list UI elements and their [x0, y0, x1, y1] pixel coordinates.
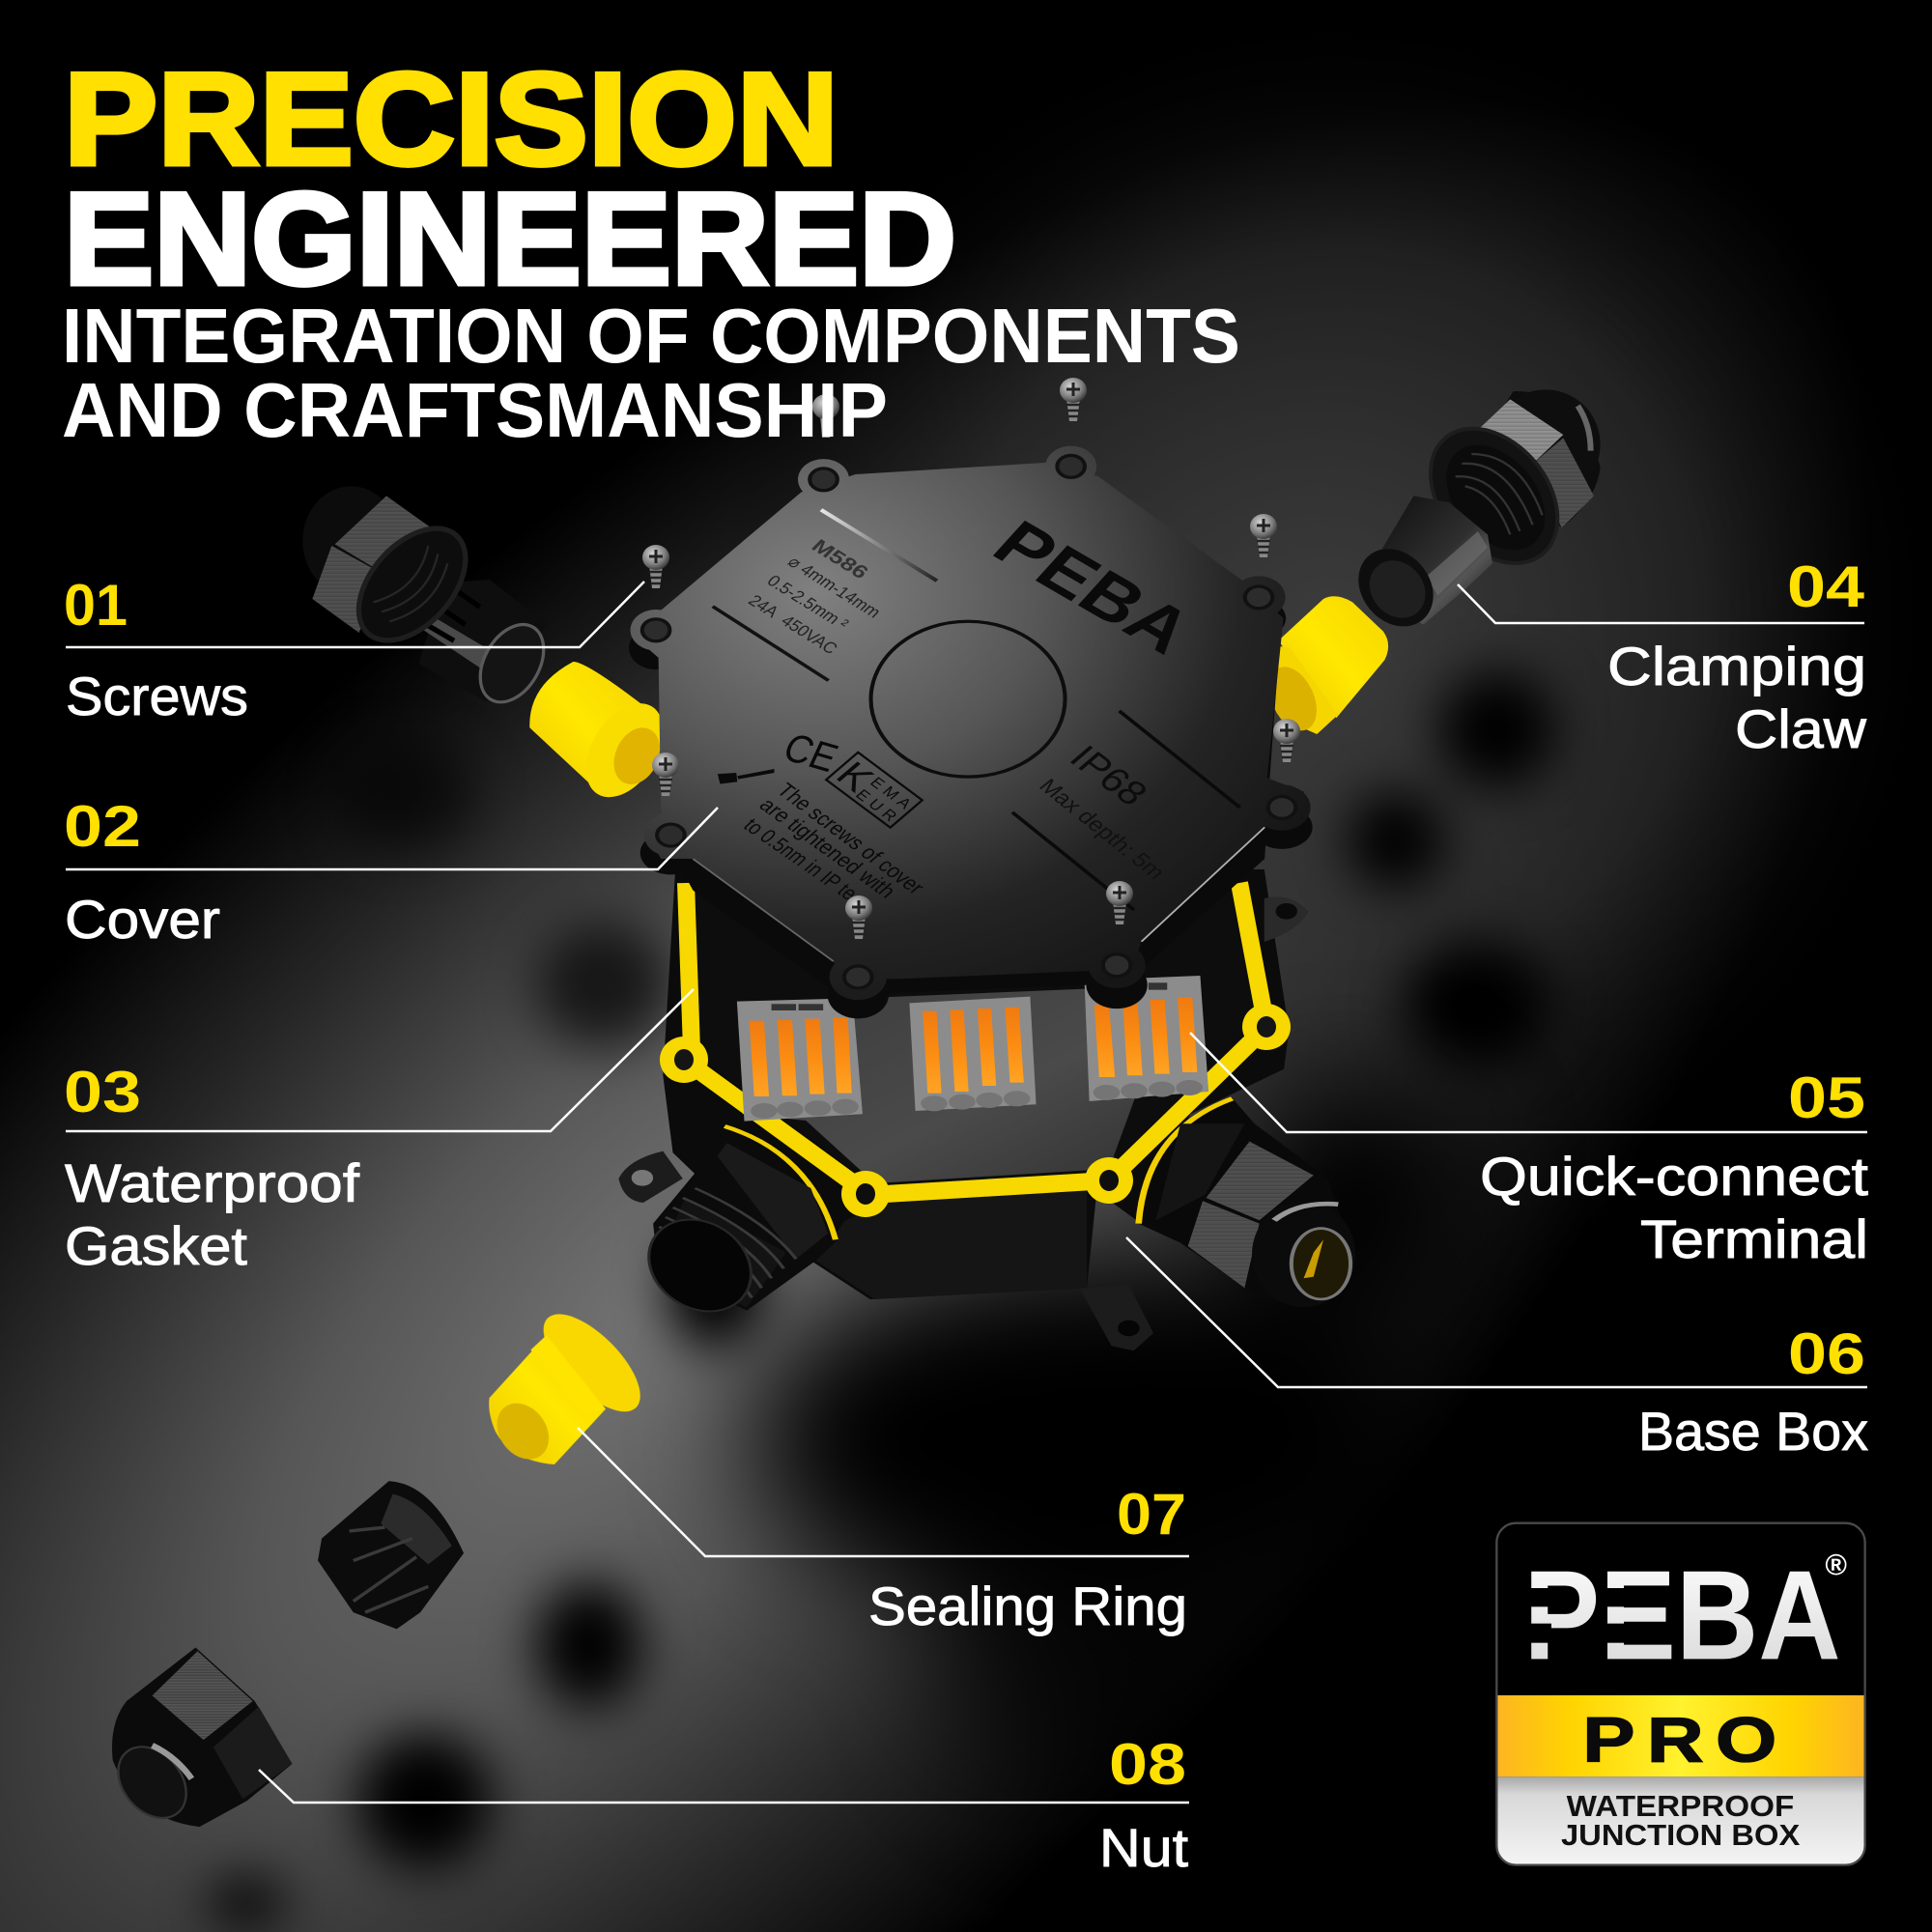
- label 07: [868, 1482, 1187, 1636]
- mounting tab hole left: [632, 1170, 653, 1186]
- terminal middle: [909, 997, 1037, 1111]
- inner floor: [693, 869, 1260, 1186]
- badge caption line 1: WATERPROOF: [1567, 1790, 1794, 1823]
- badge grey footer: [1497, 1776, 1864, 1864]
- clamping claw lower: [318, 1481, 464, 1629]
- icon: waterproof gasket: [660, 883, 1291, 1217]
- icon: top screw: [1060, 378, 1087, 421]
- label 08: 08: [1109, 1732, 1186, 1797]
- label 05: Terminal: [1640, 1208, 1868, 1269]
- label 02: [64, 794, 220, 950]
- cover model text: 0.5-2.5mm ²: [763, 571, 853, 633]
- label 06: 06: [1788, 1321, 1865, 1386]
- label 03: Gasket: [65, 1215, 247, 1276]
- label 04: Claw: [1735, 698, 1867, 759]
- front face: [815, 1190, 1087, 1299]
- cover model text: 24A 450VAC: [745, 591, 841, 658]
- label 03: 03: [64, 1060, 141, 1124]
- subheading line 1: INTEGRATION OF COMPONENTS: [62, 293, 1240, 379]
- cover edge highlight: [693, 827, 1264, 961]
- terminal right: [1085, 976, 1208, 1101]
- cover torque note: to 0.5nm in IP te: [739, 813, 863, 904]
- threaded gland, left: [634, 1126, 838, 1319]
- mounting tab hole right: [1276, 903, 1297, 920]
- sealing ring lower: [487, 1299, 657, 1468]
- cover decorative lines: [713, 510, 1240, 910]
- KEMA KEUR mark: EUR: [852, 786, 901, 825]
- KEMA KEUR mark: [825, 752, 923, 829]
- cover circle: [871, 621, 1065, 777]
- label 07: 07: [1117, 1482, 1186, 1547]
- label 02: Cover: [65, 889, 220, 950]
- nut lower: [104, 1647, 292, 1831]
- registered mark: ®: [1825, 1549, 1847, 1582]
- nut and clamp, upper right: [1343, 389, 1601, 641]
- base box: [618, 869, 1309, 1350]
- leader lines: [66, 582, 1867, 1803]
- badge caption line 2: JUNCTION BOX: [1561, 1819, 1801, 1852]
- icon: screw left: [642, 545, 669, 588]
- label 06: Base Box: [1638, 1401, 1868, 1462]
- label 01: Screws: [66, 666, 248, 726]
- label 04: [1607, 554, 1867, 759]
- quick-connect terminals: [737, 976, 1208, 1122]
- label 01: [64, 573, 248, 726]
- badge base: [1496, 1523, 1865, 1865]
- badge yellow band: [1497, 1695, 1864, 1776]
- label 04: 04: [1787, 554, 1865, 619]
- title: [62, 45, 1240, 453]
- mounting tab hole bottom: [1118, 1321, 1140, 1336]
- icon: screwdriver: [718, 769, 775, 783]
- sealing ring, upper right: [1260, 596, 1388, 738]
- cover torque note: The screws of cover: [772, 779, 930, 898]
- cover top face: [631, 446, 1311, 1000]
- label 06: [1638, 1321, 1868, 1462]
- cover model text: [745, 535, 885, 658]
- mounting tab left: [618, 1151, 683, 1203]
- label 08: [1099, 1732, 1188, 1878]
- cover logo: PEBA: [979, 507, 1208, 668]
- cover rating text: IP68: [1061, 738, 1156, 813]
- terminal left: [737, 998, 863, 1122]
- mounting tab right: [1264, 896, 1309, 942]
- nut and clamp, upper left: [302, 486, 556, 713]
- cover model text: ⌀ 4mm-14mm: [784, 553, 885, 621]
- badge PRO: PRO: [1582, 1703, 1789, 1775]
- exploded parts, lower left: [104, 1299, 657, 1831]
- badge logo: PEBA: [1523, 1544, 1841, 1686]
- cable gland, right: [1139, 1098, 1355, 1307]
- label 05: Quick-connect: [1480, 1146, 1868, 1207]
- cover screw holes: [642, 455, 1295, 988]
- CE mark: CE: [777, 724, 844, 781]
- label 01: 01: [64, 573, 128, 638]
- body: [663, 869, 1289, 1299]
- sealing ring, upper left: [529, 662, 679, 811]
- cover: [629, 446, 1313, 1018]
- KEMA KEUR mark: EMA: [867, 774, 916, 812]
- label 07: Sealing Ring: [868, 1576, 1187, 1636]
- screws on cover: [652, 719, 1300, 939]
- label 08: Nut: [1099, 1817, 1188, 1878]
- cover rating text: Max depth: 5m: [1035, 775, 1171, 884]
- cover model text: M586: [807, 535, 873, 583]
- label 03: [64, 1060, 359, 1276]
- brand badge: [1496, 1523, 1865, 1865]
- mounting tab bottom: [1079, 1285, 1153, 1350]
- badge border: [1496, 1523, 1865, 1865]
- label 03: Waterproof: [65, 1152, 359, 1213]
- heading: precision: PRECISION: [64, 45, 838, 192]
- label 02: 02: [64, 794, 141, 859]
- heading: engineered: ENGINEERED: [64, 165, 956, 312]
- cover side thickness: [629, 504, 1313, 1018]
- inner floor light: [742, 988, 1136, 1183]
- subheading line 2: AND CRAFTSMANSHIP: [62, 367, 888, 453]
- label 04: Clamping: [1607, 636, 1866, 696]
- cover torque note: are tightened with: [754, 793, 901, 902]
- label 05: [1480, 1065, 1868, 1269]
- label 05: 05: [1788, 1065, 1865, 1130]
- icon: screw right: [1250, 514, 1277, 557]
- KEMA KEUR mark: K: [828, 753, 884, 800]
- screw behind title: [812, 394, 839, 438]
